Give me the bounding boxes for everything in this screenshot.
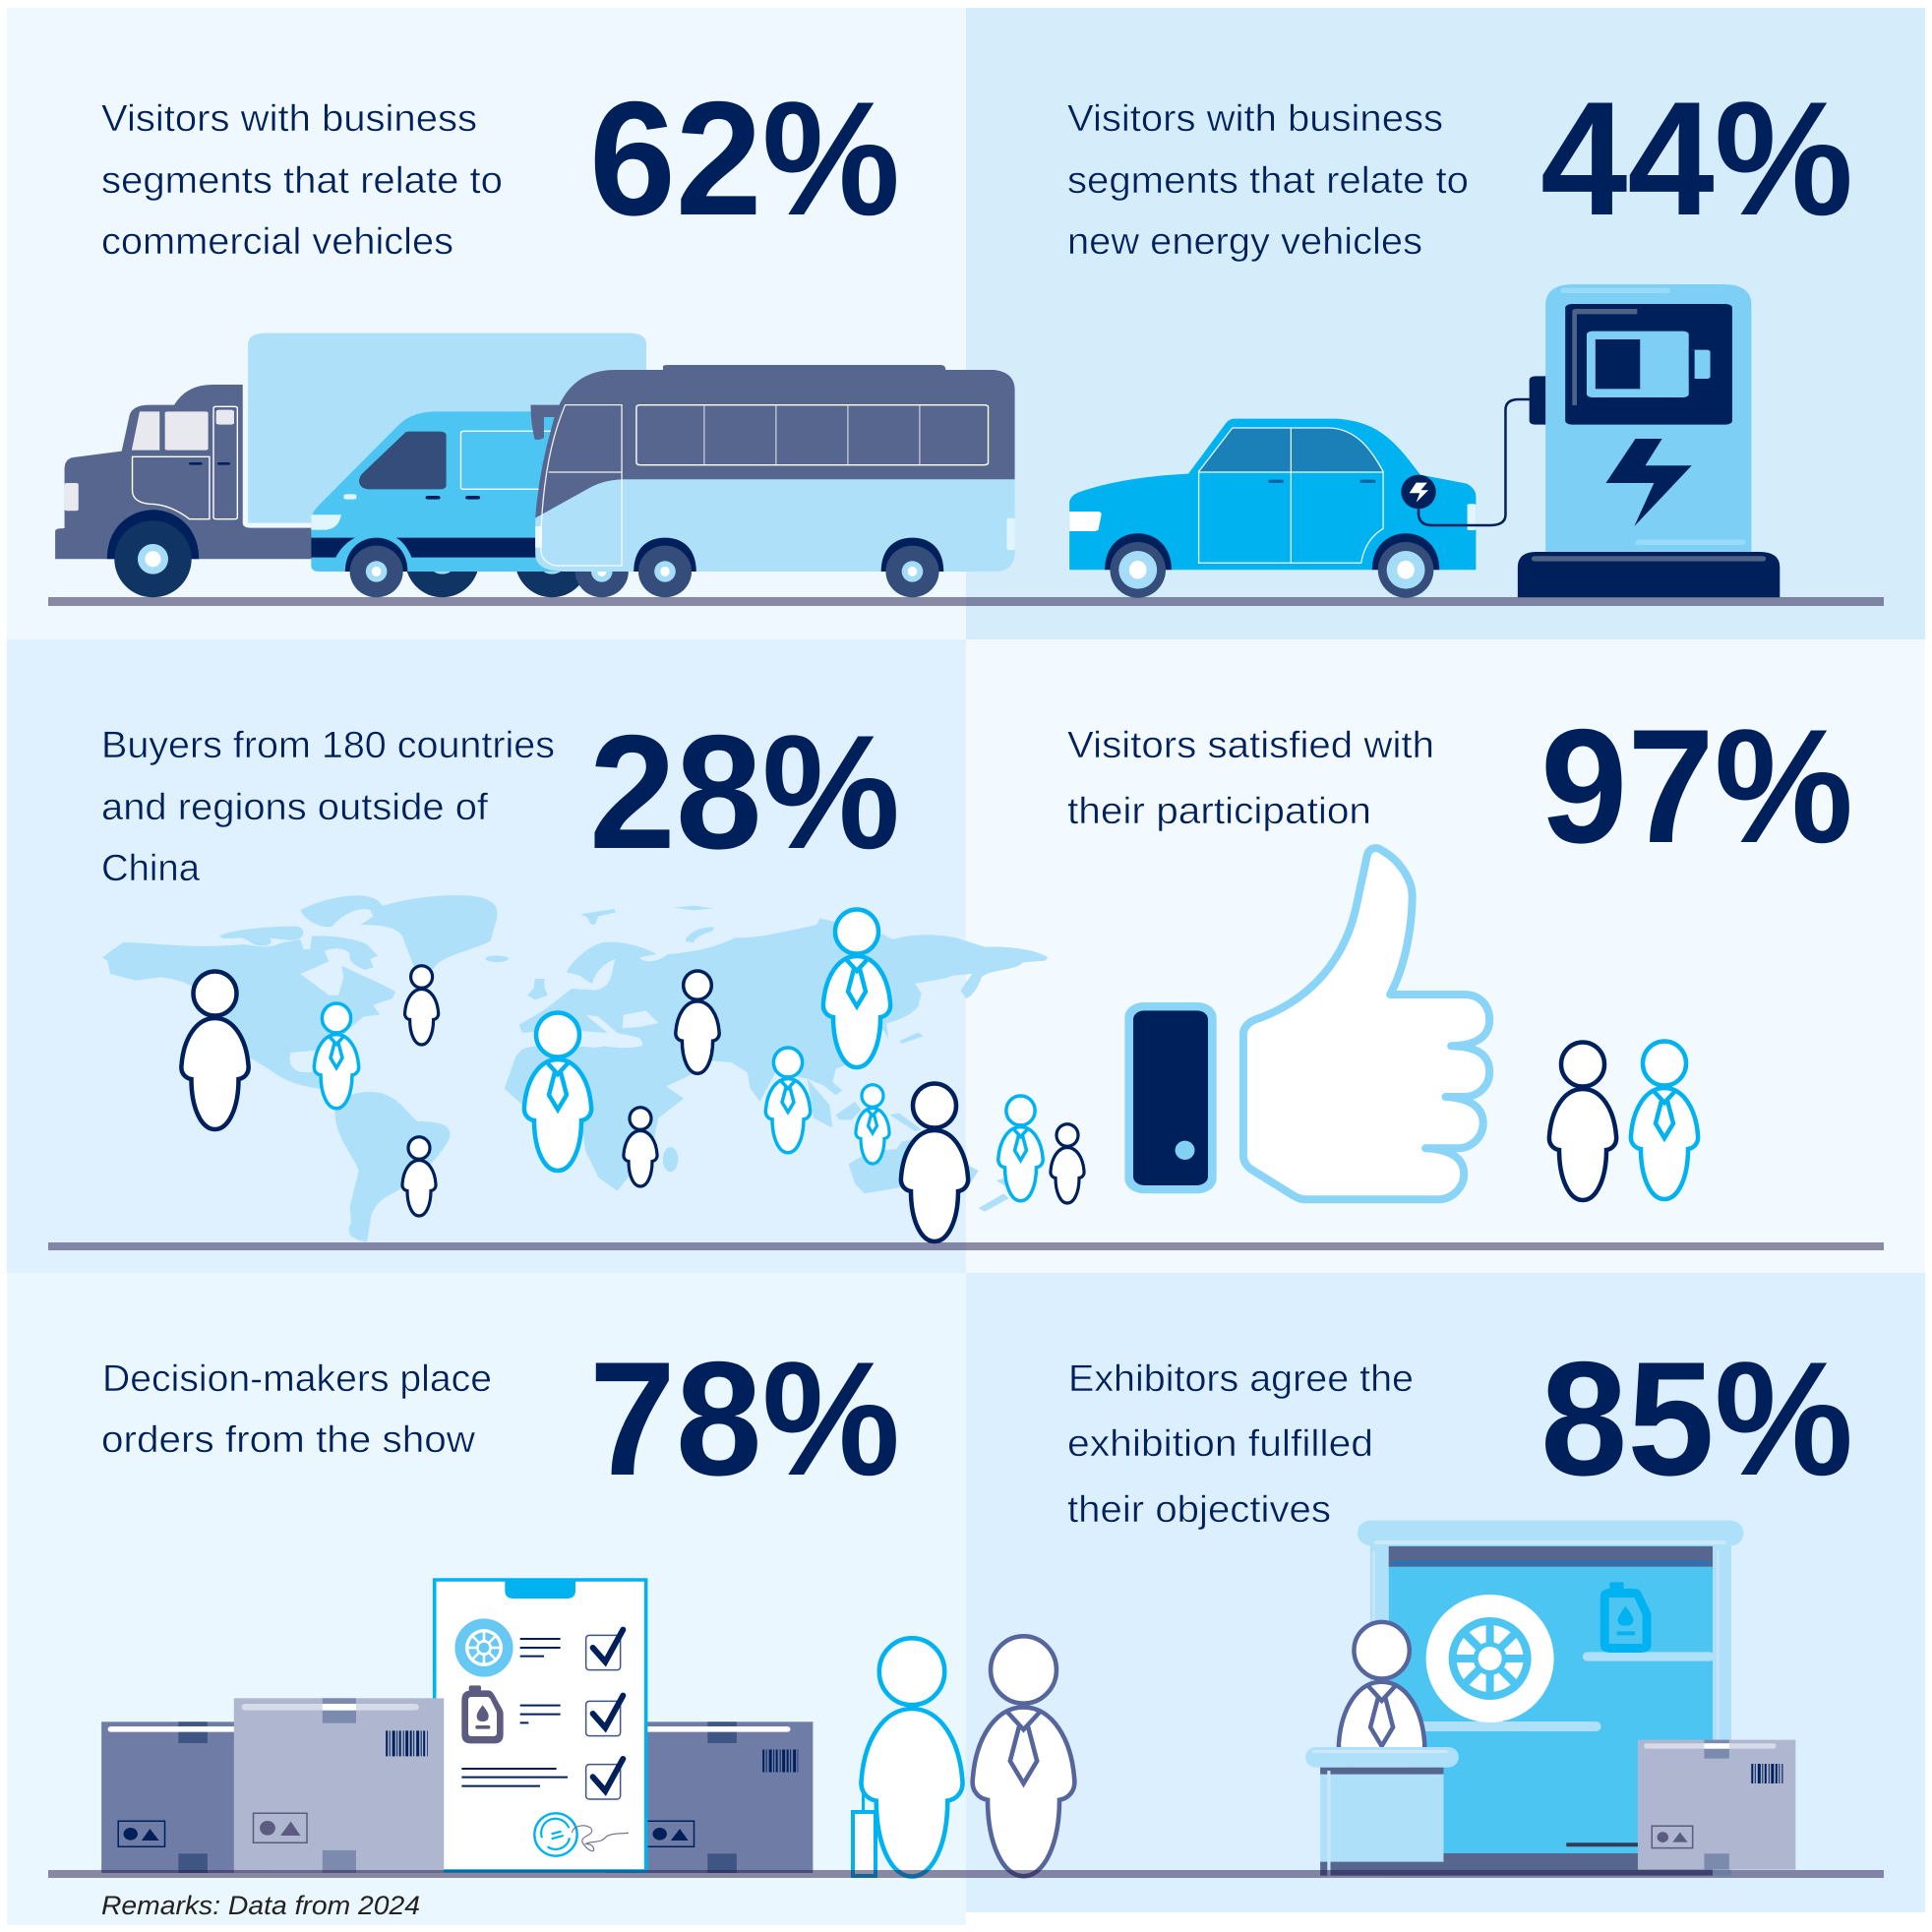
remark text: Remarks: Data from 2024: [101, 1891, 420, 1920]
truck: [55, 333, 646, 597]
icon: stamp and signature: [534, 1813, 629, 1856]
icon: staff behind desk: [1339, 1622, 1424, 1824]
ground line: row 1: [48, 597, 1884, 606]
text: commercial vehicles description: segments that relate to: [101, 160, 503, 202]
stat: 78%: 78%: [589, 1328, 900, 1509]
panel: new energy vehicles background: [966, 8, 1925, 639]
box beside booth: [1638, 1740, 1795, 1870]
text: buyers description: and regions outside of: [101, 787, 488, 828]
text: exhibitors description: exhibition fulfilled: [1067, 1423, 1373, 1465]
charging station: [1518, 284, 1780, 597]
stat: 97%: 97%: [1540, 695, 1853, 876]
illustration: boxes behind checklist: [101, 1721, 813, 1873]
panel: buyers background: [7, 639, 966, 1273]
text: exhibitors description: their objectives: [1067, 1489, 1331, 1531]
box: left dark: [101, 1721, 270, 1873]
text: satisfaction description: their participation: [1067, 791, 1371, 832]
panel: commercial vehicles background: [7, 8, 966, 639]
text: new energy description: [1067, 98, 1469, 263]
van: [311, 405, 629, 597]
panel: satisfaction background: [966, 639, 1925, 1273]
text: exhibitors description: Exhibitors agree the: [1068, 1358, 1414, 1400]
illustration: reception desk and box: [1305, 1740, 1795, 1876]
text: commercial vehicles description: Visitors with business: [101, 98, 477, 140]
box: right dark: [606, 1721, 813, 1873]
box: middle light: [234, 1698, 444, 1873]
illustration: electric car and charging station: [1069, 284, 1780, 598]
icon: wheel on booth: [1426, 1595, 1554, 1722]
text: satisfaction description: Visitors satisfied with: [1067, 725, 1434, 766]
reception desk: [1305, 1747, 1459, 1876]
text: commercial vehicles description: [101, 98, 503, 263]
booth structure: [1358, 1521, 1743, 1876]
checklist clipboard: [435, 1580, 646, 1871]
icon: visitor with suitcase: [853, 1638, 963, 1877]
checklist lines: [461, 1639, 568, 1786]
text: new energy description: segments that relate to: [1067, 160, 1469, 202]
panel: exhibitors background: [966, 1273, 1925, 1912]
text: buyers description: China: [101, 848, 201, 889]
ground line: row 3: [48, 1870, 1884, 1878]
icon: oil bottle: [461, 1685, 504, 1743]
text: decision-makers description: Decision-makers place: [102, 1358, 492, 1400]
stat: 62%: 62%: [589, 68, 900, 249]
illustration: world map: [102, 895, 1048, 1242]
icon group: people across the map: [181, 909, 1084, 1241]
electric car: [1069, 399, 1531, 598]
icon: wheel on checklist: [454, 1618, 513, 1677]
icon: businessman with tie: [973, 1636, 1074, 1876]
ground line: row 2: [48, 1242, 1884, 1250]
text: satisfaction description: [1067, 725, 1434, 832]
icon: check boxes: [586, 1630, 623, 1799]
icon: two people beside thumb: [1549, 1041, 1698, 1200]
text: decision-makers description: [101, 1358, 492, 1461]
bottle on shelf: [1600, 1582, 1652, 1653]
text: decision-makers description: orders from the show: [101, 1419, 476, 1461]
text: exhibitors description: [1067, 1358, 1414, 1531]
icon: thumbs up with cuff: [1124, 848, 1489, 1199]
stat: 44%: 44%: [1540, 68, 1853, 249]
text: buyers description: Buyers from 180 countries: [101, 725, 555, 766]
text: new energy description: Visitors with business: [1067, 98, 1443, 140]
text: commercial vehicles description: commercial vehicles: [101, 221, 453, 263]
bus: [535, 365, 1015, 597]
panel: decision-makers background: [7, 1273, 966, 1925]
text: buyers description: [101, 725, 555, 889]
text: new energy description: new energy vehicles: [1067, 221, 1422, 263]
illustration: truck, van and bus: [55, 333, 1015, 597]
stat: 85%: 85%: [1540, 1328, 1853, 1509]
illustration: exhibition booth: [1358, 1521, 1743, 1876]
stat: 28%: 28%: [589, 701, 900, 882]
